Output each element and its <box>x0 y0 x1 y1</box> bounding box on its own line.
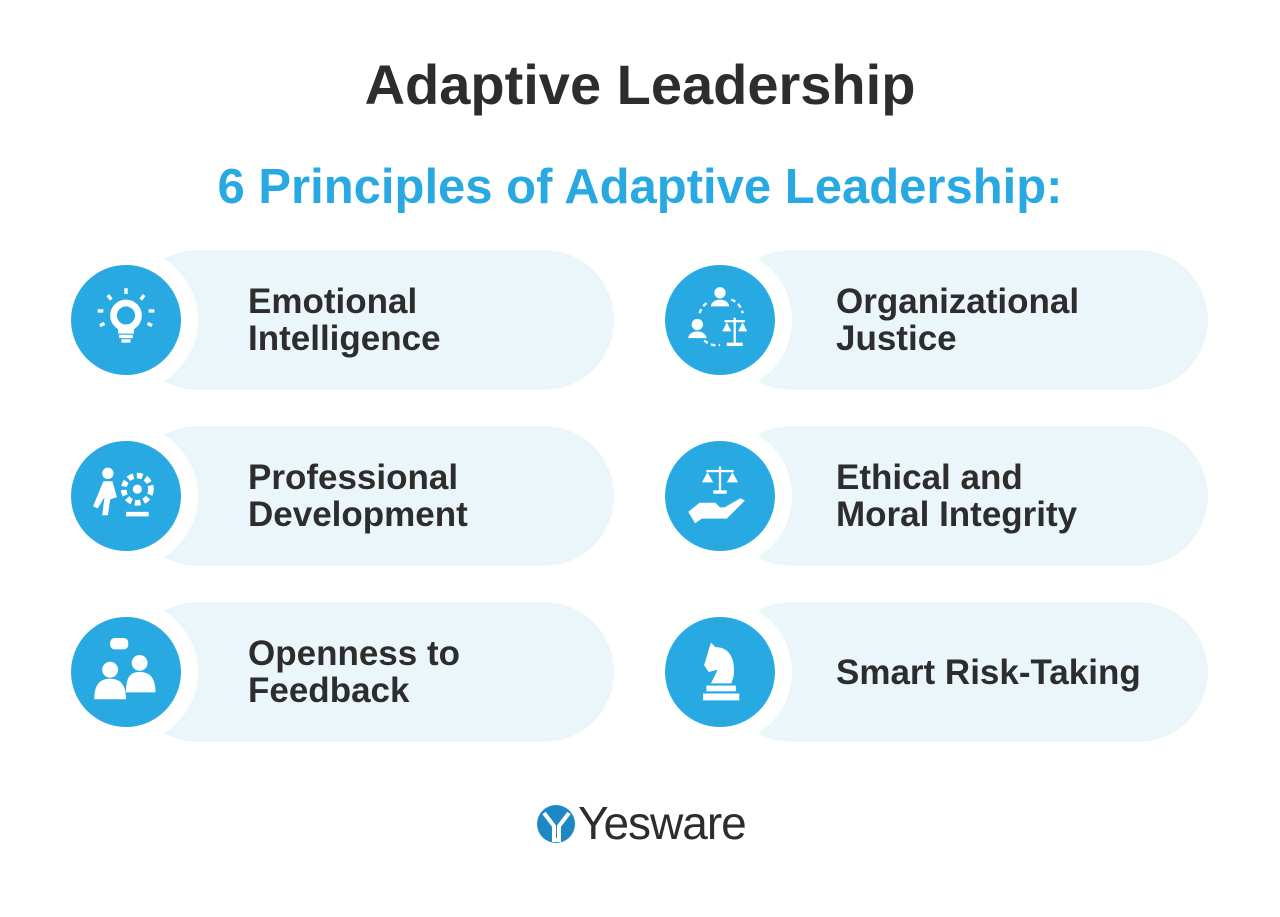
label: Justice <box>836 319 957 358</box>
subtitle: 6 Principles of Adaptive Leadership: <box>217 160 1062 214</box>
card: Ethical and Moral Integrity <box>665 426 1208 566</box>
label <box>248 458 468 534</box>
label: Development <box>248 495 468 534</box>
label: Professional <box>248 458 458 497</box>
card: Smart Risk-Taking <box>665 602 1208 742</box>
label: Emotional <box>248 282 417 321</box>
label <box>248 634 460 710</box>
label: Openness to <box>248 634 460 673</box>
label <box>248 282 441 358</box>
label <box>836 458 1077 534</box>
icon: person with gear <box>71 441 181 551</box>
title: Adaptive Leadership <box>365 53 915 116</box>
card: Organizational Justice <box>665 250 1208 390</box>
card: Emotional Intelligence <box>71 250 614 390</box>
card: Professional Development <box>71 426 614 566</box>
icon: people and scale <box>665 265 775 375</box>
label: Feedback <box>248 671 409 710</box>
icon: hand with scale <box>665 441 775 551</box>
icon: chess knight <box>665 617 775 727</box>
label: Intelligence <box>248 319 441 358</box>
label <box>836 282 1079 358</box>
label: Smart Risk-Taking <box>836 652 1141 692</box>
card: Openness to Feedback <box>71 602 614 742</box>
icon: two people with speech bubble <box>71 617 181 727</box>
label: Ethical and <box>836 458 1023 497</box>
label: Organizational <box>836 282 1079 321</box>
logo: Yesware: Yesware <box>578 797 746 849</box>
icon: lightbulb brain <box>71 265 181 375</box>
label: Moral Integrity <box>836 495 1077 534</box>
